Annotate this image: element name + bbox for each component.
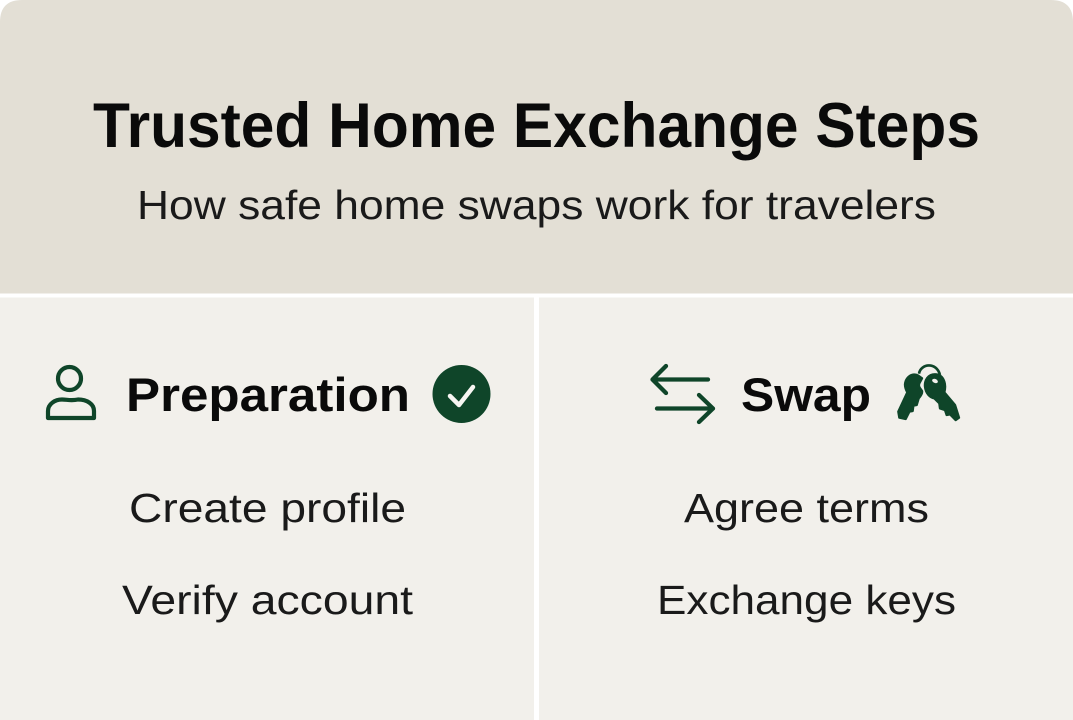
heading: swap: Swap — [741, 368, 871, 421]
step: verify account: Verify account — [122, 577, 414, 623]
icon: swap arrows — [652, 366, 713, 422]
icon: check badge — [432, 365, 490, 423]
title: Trusted Home Exchange Steps — [93, 91, 980, 161]
subtitle: How safe home swaps work for travelers — [137, 182, 936, 228]
panel: header — [0, 0, 1073, 294]
step: agree terms: Agree terms — [684, 485, 929, 531]
icon: keys — [898, 365, 959, 420]
icon: person — [48, 367, 94, 418]
step: exchange keys: Exchange keys — [657, 577, 956, 623]
panel: swap — [539, 298, 1073, 720]
heading: preparation: Preparation — [126, 368, 410, 421]
step: create profile: Create profile — [129, 485, 406, 531]
panel: preparation — [0, 298, 534, 720]
